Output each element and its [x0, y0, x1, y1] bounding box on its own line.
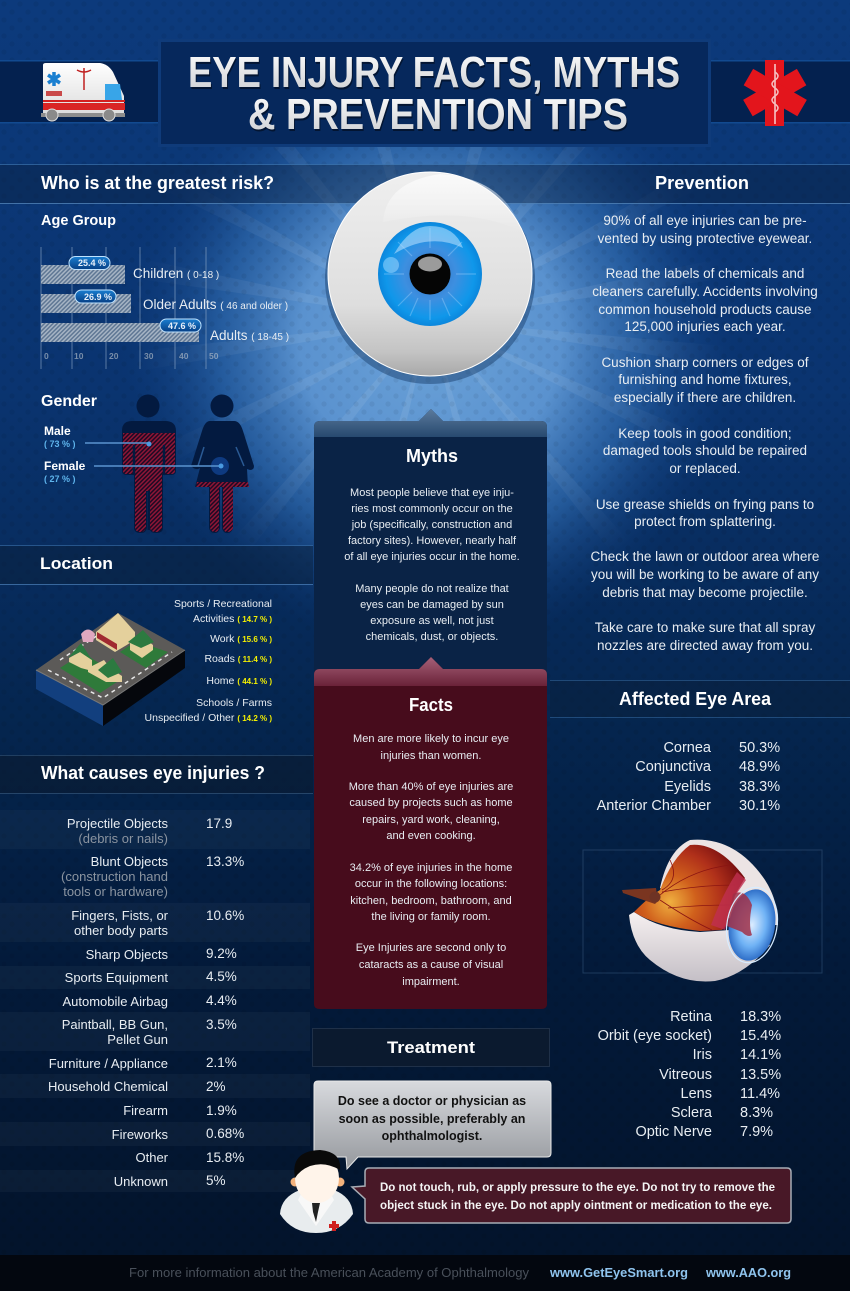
gender labels: Female [44, 459, 86, 473]
table: causes of eye injuries: Projectile Objects [67, 816, 168, 831]
table: causes of eye injuries: 15.8% [206, 1150, 244, 1165]
table: causes of eye injuries: Household Chemical [48, 1079, 168, 1094]
panel: facts: kitchen, bedroom, bathroom, and [350, 895, 512, 907]
table: causes of eye injuries: Automobile Airbag [62, 994, 168, 1009]
bar chart: age group: 0 [44, 351, 49, 361]
table: causes of eye injuries: Furniture / Appliance [49, 1056, 168, 1071]
panel: myths: exposure as well, not just [370, 615, 494, 627]
text: prevention tips: 90% of all eye injuries can be pre- [603, 213, 807, 228]
table: causes of eye injuries: 9.2% [206, 946, 237, 961]
table: affected areas bottom: Orbit (eye socket) [598, 1028, 712, 1044]
table: affected areas bottom [598, 1009, 781, 1140]
panel: myths [314, 409, 547, 672]
icon: star of life [743, 60, 807, 126]
illustration: town block [36, 613, 185, 726]
bar chart: age group [41, 247, 289, 369]
table: affected areas top: Eyelids [664, 779, 711, 795]
table: causes of eye injuries: 13.3% [206, 854, 244, 869]
table: affected areas top: 38.3% [739, 779, 780, 795]
text: prevention tips: common household products cause [598, 302, 812, 317]
table: affected areas top: 30.1% [739, 798, 780, 814]
location list [145, 598, 272, 724]
location list: Sports / Recreational [174, 598, 272, 610]
table: affected areas bottom: Retina [670, 1009, 713, 1025]
section band: who is at risk [0, 164, 850, 204]
table: causes of eye injuries: 4.5% [206, 969, 237, 984]
table: causes of eye injuries: tools or hardware) [63, 884, 168, 899]
table: causes of eye injuries: Unknown [114, 1174, 168, 1189]
panel: facts: repairs, yard work, cleaning, [362, 814, 500, 826]
bar chart: age group: 50 [209, 351, 219, 361]
table: causes of eye injuries: 2.1% [206, 1055, 237, 1070]
panel: facts: Men are more likely to incur eye [353, 733, 509, 745]
panel: facts: injuries than women. [381, 750, 481, 762]
table: causes of eye injuries: Fingers, Fists, or [71, 908, 169, 923]
heading box: treatment: Treatment [387, 1038, 475, 1057]
gender figures [122, 394, 254, 533]
table: causes of eye injuries: 5% [206, 1173, 226, 1188]
callout: do not touch [352, 1168, 791, 1223]
heading box: treatment [312, 1028, 550, 1066]
location list: Roads ( 11.4 % ) [204, 653, 272, 665]
table: affected areas bottom: Iris [693, 1047, 712, 1063]
callout: do not touch: Do not touch, rub, or apply pressure to the eye. Do not try to remove the [380, 1182, 775, 1194]
location list: Unspecified / Other ( 14.2 % ) [145, 712, 272, 724]
panel: myths: Myths [406, 446, 458, 466]
bar chart: age group: Children ( 0-18 ) [133, 266, 219, 281]
icon: doctor [280, 1150, 353, 1233]
panel: facts: More than 40% of eye injuries are [349, 781, 513, 793]
panel: facts: Facts [409, 695, 453, 715]
table: causes of eye injuries: Pellet Gun [107, 1032, 168, 1047]
text: prevention tips: debris that may become projectile. [602, 585, 808, 600]
title: & PREVENTION TIPS [248, 90, 628, 139]
text: prevention tips: you will be working to be aware of any [591, 567, 819, 582]
panel: facts: the living or family room. [371, 911, 491, 923]
table: affected areas top: Anterior Chamber [597, 798, 711, 814]
table: causes of eye injuries: Fireworks [112, 1127, 168, 1142]
section band: location: Location [40, 554, 113, 573]
table: causes of eye injuries: Other [135, 1150, 169, 1165]
footer: www.GetEyeSmart.org [549, 1265, 688, 1280]
section band: causes: What causes eye injuries ? [41, 763, 265, 783]
text: prevention tips: 125,000 injuries each year. [624, 319, 786, 334]
text: prevention tips: protect from splattering. [634, 514, 776, 529]
callout: see a doctor: soon as possible, preferably an [339, 1112, 525, 1126]
text: prevention tips [591, 213, 819, 653]
panel: facts: caused by projects such as home [349, 797, 513, 809]
text: prevention tips: furnishing and home fixtures, [618, 372, 792, 387]
panel: facts: cataracts as a cause of visual [359, 959, 503, 971]
bar chart: age group: 30 [144, 351, 154, 361]
table: causes of eye injuries: 3.5% [206, 1017, 237, 1032]
gender labels: ( 27 % ) [44, 474, 76, 484]
table: affected areas bottom: 14.1% [740, 1047, 781, 1063]
heading: prevention: Prevention [655, 173, 749, 193]
panel: facts: Eye Injuries are second only to [356, 942, 506, 954]
table: causes of eye injuries: Firearm [123, 1103, 168, 1118]
title: EYE INJURY FACTS, MYTHS [189, 50, 681, 99]
footer: www.AAO.org [705, 1265, 791, 1280]
text: prevention tips: or replaced. [669, 461, 741, 476]
text: prevention tips: Use grease shields on frying pans to [596, 497, 814, 512]
location list: Activities ( 14.7 % ) [193, 613, 272, 625]
location list: Work ( 15.6 % ) [210, 633, 272, 645]
panel: facts: impairment. [402, 976, 460, 988]
table: affected areas bottom: Sclera [671, 1105, 713, 1121]
section band: who is at risk: Who is at the greatest risk? [41, 173, 274, 193]
bar chart: age group: Older Adults ( 46 and older ) [143, 297, 288, 312]
text: prevention tips: damaged tools should be repaired [603, 443, 807, 458]
table: causes of eye injuries: (construction hand [61, 869, 168, 884]
table: causes of eye injuries: 17.9 [206, 816, 232, 831]
panel: facts [314, 657, 547, 1009]
table: affected areas top: 50.3% [739, 740, 780, 756]
panel: myths: factory sites). However, nearly half [348, 535, 517, 547]
table: affected areas bottom: Lens [681, 1086, 712, 1102]
table: affected areas bottom: 11.4% [740, 1086, 780, 1102]
table: causes of eye injuries: 4.4% [206, 993, 237, 1008]
table: causes of eye injuries: Sports Equipment [65, 970, 168, 985]
panel: myths: Many people do not realize that [355, 583, 509, 595]
callout: see a doctor: ophthalmologist. [382, 1129, 482, 1143]
text: prevention tips: nozzles are directed away from you. [597, 638, 813, 653]
table: causes of eye injuries: Paintball, BB Gun, [62, 1017, 168, 1032]
section band: affected eye area: Affected Eye Area [619, 689, 772, 709]
panel: myths: Most people believe that eye inju- [350, 487, 514, 499]
table: affected areas bottom: 13.5% [740, 1067, 781, 1083]
panel: myths: job (specifically, construction and [351, 519, 512, 531]
bar chart: age group: 26.9 % [84, 292, 112, 302]
table: causes of eye injuries: 1.9% [206, 1103, 237, 1118]
panel: facts: occur in the following locations: [355, 878, 507, 890]
bar chart: age group: 47.6 % [168, 321, 196, 331]
text: prevention tips: Cushion sharp corners or edges of [601, 355, 809, 370]
table: affected areas bottom: 7.9% [740, 1124, 773, 1140]
heading: age group: Age Group [41, 212, 116, 229]
table: affected areas bottom: 18.3% [740, 1009, 781, 1025]
text: prevention tips: Read the labels of chemicals and [606, 266, 804, 281]
section band: affected eye area [550, 680, 850, 718]
illustration: eyeball [325, 172, 535, 384]
table: affected areas bottom: Optic Nerve [635, 1124, 712, 1140]
section band: causes [0, 755, 313, 794]
table: affected areas bottom: 15.4% [740, 1028, 781, 1044]
title: & PREVENTION TIPS [249, 92, 629, 141]
table: causes of eye injuries [0, 810, 310, 1192]
panel: myths: of all eye injuries occur in the home. [344, 551, 520, 563]
heading: gender: Gender [41, 393, 97, 410]
bar chart: age group: 25.4 % [78, 258, 106, 268]
text: prevention tips: especially if there are children. [614, 390, 796, 405]
table: causes of eye injuries: Sharp Objects [86, 947, 168, 962]
title [160, 40, 710, 146]
bar chart: age group: 20 [109, 351, 119, 361]
callout: see a doctor: Do see a doctor or physician as [338, 1094, 526, 1108]
table: causes of eye injuries: (debris or nails) [78, 831, 168, 846]
bar chart: age group: 10 [74, 351, 84, 361]
text: prevention tips: Take care to make sure that all spray [595, 620, 816, 635]
title: EYE INJURY FACTS, MYTHS [188, 48, 680, 97]
table: affected areas top: Conjunctiva [635, 759, 712, 775]
footer [0, 1255, 850, 1291]
table: causes of eye injuries: 0.68% [206, 1126, 244, 1141]
bar chart: age group: Adults ( 18-45 ) [210, 328, 289, 343]
text: prevention tips: Keep tools in good condition; [618, 426, 792, 441]
section band: location [0, 545, 313, 585]
table: causes of eye injuries: 10.6% [206, 908, 244, 923]
table: affected areas bottom: Vitreous [659, 1067, 712, 1083]
panel: myths: eyes can be damaged by sun [360, 599, 504, 611]
location list: Schools / Farms [196, 697, 272, 709]
text: prevention tips: cleaners carefully. Accidents involving [592, 284, 818, 299]
callout: do not touch: object stuck in the eye. Do not apply ointment or medication to the eye. [380, 1200, 772, 1212]
bar chart: age group: 40 [179, 351, 189, 361]
table: affected areas top: Cornea [663, 740, 712, 756]
panel: facts: and even cooking. [386, 830, 476, 842]
panel: facts: 34.2% of eye injuries in the home [350, 862, 512, 874]
panel: myths: chemicals, dust, or objects. [366, 631, 498, 643]
text: prevention tips: vented by using protective eyewear. [598, 231, 812, 246]
table: affected areas top [597, 740, 780, 814]
location list: Home ( 44.1 % ) [206, 675, 272, 687]
gender labels: ( 73 % ) [44, 439, 76, 449]
footer: For more information about the American Academy of Ophthalmology [129, 1265, 529, 1280]
illustration: eye cross section [583, 840, 822, 982]
table: causes of eye injuries: other body parts [74, 923, 168, 938]
panel: myths: ries most commonly occur on the [351, 503, 513, 515]
gender labels [44, 424, 224, 484]
callout: see a doctor [314, 1081, 551, 1169]
gender labels: Male [44, 424, 71, 438]
icon: ambulance [41, 63, 125, 121]
table: affected areas bottom: 8.3% [740, 1105, 773, 1121]
table: causes of eye injuries: Blunt Objects [91, 854, 168, 869]
header band [0, 60, 850, 124]
table: affected areas top: 48.9% [739, 759, 780, 775]
table: causes of eye injuries: 2% [206, 1079, 226, 1094]
text: prevention tips: Check the lawn or outdoor area where [591, 549, 819, 564]
